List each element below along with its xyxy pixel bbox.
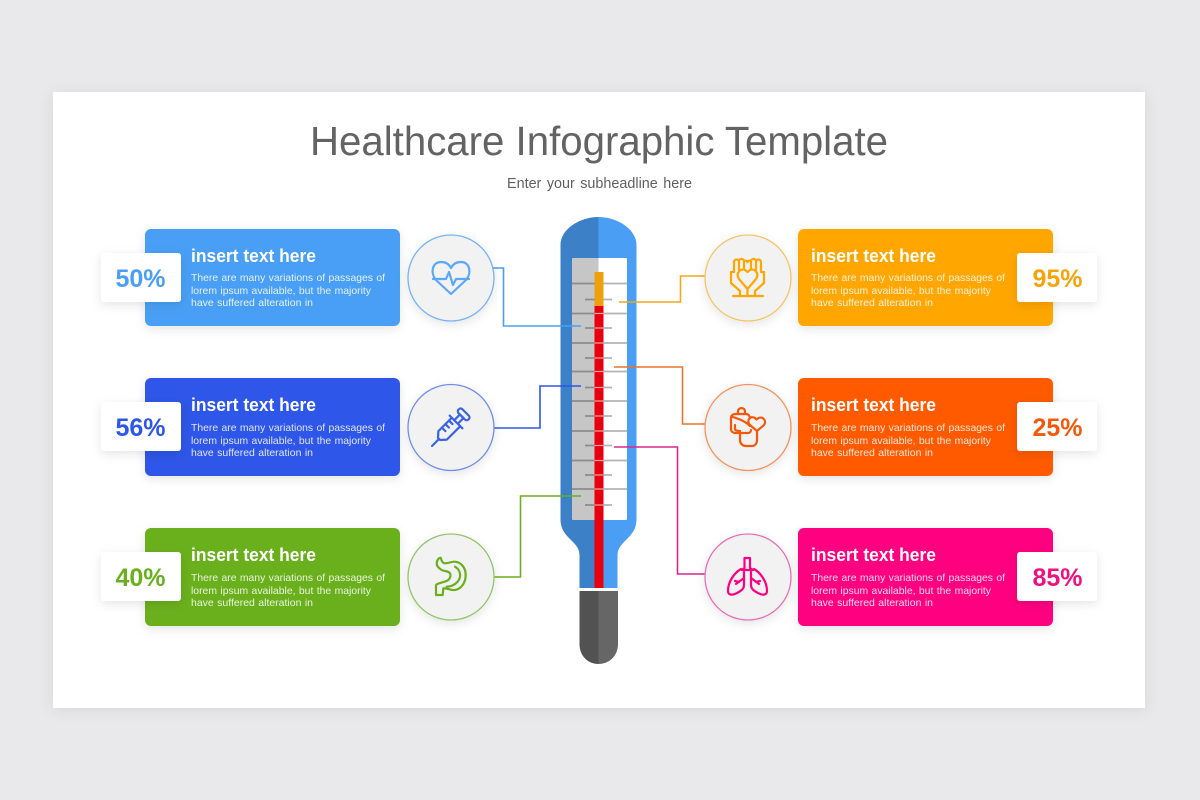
icon: hands holding heart [705, 235, 791, 321]
connector: green [494, 496, 581, 577]
card: 25% [798, 378, 1097, 476]
card body text: have suffered alteration in [811, 597, 933, 609]
percent box [1017, 552, 1097, 601]
card body text: lorem ipsum available, but the majority [191, 285, 372, 297]
percent value: 95% [1032, 265, 1083, 293]
title: Healthcare Infographic Template [310, 118, 888, 164]
percent box [1017, 402, 1097, 451]
thermometer [560, 217, 636, 664]
percent box [101, 253, 181, 302]
card body text: There are many variations of passages of [191, 422, 385, 434]
subheadline: Enter your subheadline here [507, 176, 692, 192]
left shade [560, 217, 598, 664]
card heading: insert text here [811, 395, 936, 415]
card body text [811, 422, 1005, 459]
card body text: have suffered alteration in [811, 297, 933, 309]
card body text: lorem ipsum available, but the majority [811, 285, 992, 297]
card body text [191, 422, 385, 459]
percent value: 40% [115, 564, 166, 592]
card body text [811, 572, 1005, 609]
card: 50% [101, 229, 400, 326]
card body text: There are many variations of passages of [191, 572, 385, 584]
glass window [572, 258, 627, 520]
amber mercury top [594, 272, 604, 306]
window shade [572, 258, 598, 520]
icon: heart pulse [408, 235, 494, 321]
connector: amber [619, 276, 705, 302]
card: 95% [798, 229, 1097, 326]
slide panel [53, 92, 1145, 708]
connector: blue [493, 268, 581, 326]
card: 85% [798, 528, 1097, 626]
card: 56% [101, 378, 400, 476]
card body text: There are many variations of passages of [811, 422, 1005, 434]
thermometer body [560, 217, 636, 588]
connector: navy [494, 386, 581, 428]
percent box [101, 552, 181, 601]
card body text: lorem ipsum available, but the majority [811, 585, 992, 597]
icon: syringe [408, 384, 494, 470]
card body text [191, 572, 385, 609]
percent value: 56% [115, 414, 166, 442]
card heading: insert text here [191, 395, 316, 415]
percent value: 85% [1032, 564, 1083, 592]
card: 40% [101, 528, 400, 626]
red mercury column [594, 306, 604, 588]
card body text [191, 272, 385, 309]
connector: pink [614, 447, 705, 574]
card body text: lorem ipsum available, but the majority [811, 435, 992, 447]
card body text: There are many variations of passages of [811, 572, 1005, 584]
bulb cap [580, 591, 618, 664]
tube tick highlights [594, 314, 604, 505]
percent value: 25% [1032, 414, 1083, 442]
icon: lungs [705, 534, 791, 620]
card body text: lorem ipsum available, but the majority [191, 585, 372, 597]
card heading: insert text here [191, 545, 316, 565]
card body text [811, 272, 1005, 309]
card body text: There are many variations of passages of [811, 272, 1005, 284]
card body text: There are many variations of passages of [191, 272, 385, 284]
card heading: insert text here [191, 246, 316, 266]
card body text: have suffered alteration in [191, 447, 313, 459]
card heading: insert text here [811, 246, 936, 266]
card body text: lorem ipsum available, but the majority [191, 435, 372, 447]
icon: gift bag with heart [705, 384, 791, 470]
percent value: 50% [115, 265, 166, 293]
card body text: have suffered alteration in [191, 597, 313, 609]
connector: orange [614, 367, 705, 424]
icon: stomach [408, 534, 494, 620]
percent box [101, 402, 181, 451]
scale ticks [572, 284, 627, 505]
percent box [1017, 253, 1097, 302]
card heading: insert text here [811, 545, 936, 565]
card body text: have suffered alteration in [191, 297, 313, 309]
card body text: have suffered alteration in [811, 447, 933, 459]
